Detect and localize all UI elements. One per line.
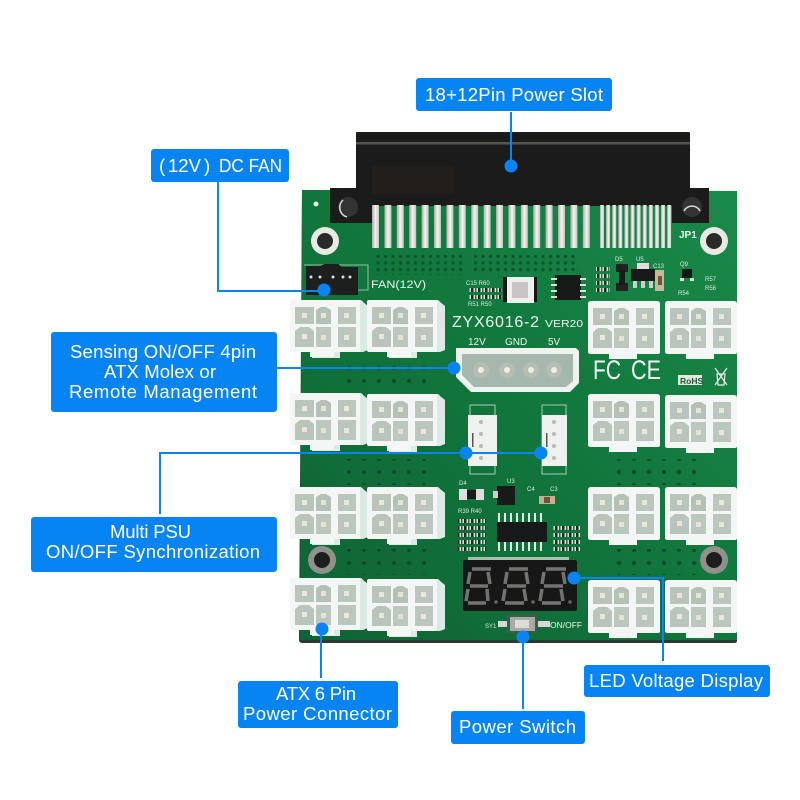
6 pin connectors: [290, 300, 737, 638]
callout: ATX 6 Pin: Power Connector: [243, 703, 392, 724]
LED voltage display: [463, 557, 577, 611]
callout: Power Switch: Power Switch: [459, 716, 576, 737]
sync control components: R39 R40: [458, 509, 482, 515]
LED chip and control chips: [466, 264, 610, 308]
narrow pins: [600, 205, 671, 248]
regulator components top right: Q9: [680, 262, 689, 268]
callout: Multi PSU: ON/OFF Synchronization: [46, 541, 260, 562]
sync control components: D4: [459, 481, 467, 487]
regulator components top right: R57: [705, 277, 717, 283]
regulator components top right: [615, 257, 717, 297]
sync control components: C3: [550, 487, 558, 493]
molex 4 pin connector: GND: [505, 337, 527, 348]
callout: Multi PSU: Multi PSU: [110, 521, 191, 542]
regulator components top right: D5: [615, 257, 623, 263]
regulator components top right: U5: [636, 257, 644, 263]
callout: LED Voltage Display: LED Voltage Display: [589, 670, 764, 691]
sync connector right: [542, 405, 567, 474]
molex 4 pin connector: 12V: [468, 337, 486, 348]
via hole grids: [344, 254, 702, 575]
board model text: ZYX6016-2: [452, 314, 539, 331]
certification marks: RoHS: [680, 376, 703, 386]
callout: Multi PSU: [31, 517, 277, 572]
molex 4 pin connector: [456, 337, 579, 392]
callout: LED Voltage Display: [584, 665, 770, 697]
leader lines: [160, 112, 663, 709]
regulator components top right: R54: [678, 291, 690, 297]
power switch: [485, 615, 582, 633]
callout: (12V) DC FAN: 12V: [168, 155, 202, 176]
callout: Sensing ON/OFF: [51, 332, 277, 412]
JP1 label: JP1: [679, 230, 697, 241]
sync control components: U3: [507, 479, 515, 485]
slot: 18+12 pin black power connector: [330, 132, 709, 248]
power switch: SY1: [485, 624, 497, 630]
board model text: [452, 314, 584, 331]
LED chip and control chips: C15 R60: [466, 281, 490, 287]
sync connector left: [468, 405, 497, 474]
regulator components top right: C13: [653, 264, 665, 270]
certification marks: CE: [631, 355, 661, 385]
sync control components: [458, 479, 581, 551]
board model text: VER20: [545, 319, 584, 330]
sync control components: C4: [527, 487, 535, 493]
callout: (12V) DC FAN: (: [159, 155, 166, 176]
certification marks: FC: [593, 355, 621, 385]
callout: ATX 6 Pin: ATX 6 Pin: [276, 683, 356, 704]
LED chip and control chips: R51 R50: [468, 302, 492, 308]
fan label: FAN(12V): [371, 279, 426, 291]
power switch: ON/OFF: [550, 620, 582, 630]
mounting holes: [308, 202, 728, 574]
callout: Power Switch: [451, 711, 585, 744]
panel: green PCB board: [299, 190, 737, 643]
callout: Sensing ON/OFF: ATX Molex or: [104, 361, 216, 382]
fan header: [304, 264, 368, 295]
callout: ATX 6 Pin: [238, 681, 398, 728]
callout: Sensing ON/OFF: Sensing ON/OFF 4pin: [70, 341, 256, 362]
molex 4 pin connector: 5V: [548, 337, 561, 348]
callout: Sensing ON/OFF: Remote Management: [69, 381, 257, 402]
callout: (12V) DC FAN: [151, 149, 289, 182]
callout: 18+12Pin Power Slot: [416, 78, 612, 111]
certification marks: [593, 355, 727, 386]
callout: (12V) DC FAN: ): [204, 155, 210, 176]
leader dots: [316, 160, 580, 644]
wide pins: [372, 205, 590, 248]
callout: 18+12Pin Power Slot: 18+12Pin Power Slot: [425, 84, 603, 105]
regulator components top right: R56: [705, 286, 717, 292]
callout: (12V) DC FAN: DC FAN: [219, 155, 282, 176]
